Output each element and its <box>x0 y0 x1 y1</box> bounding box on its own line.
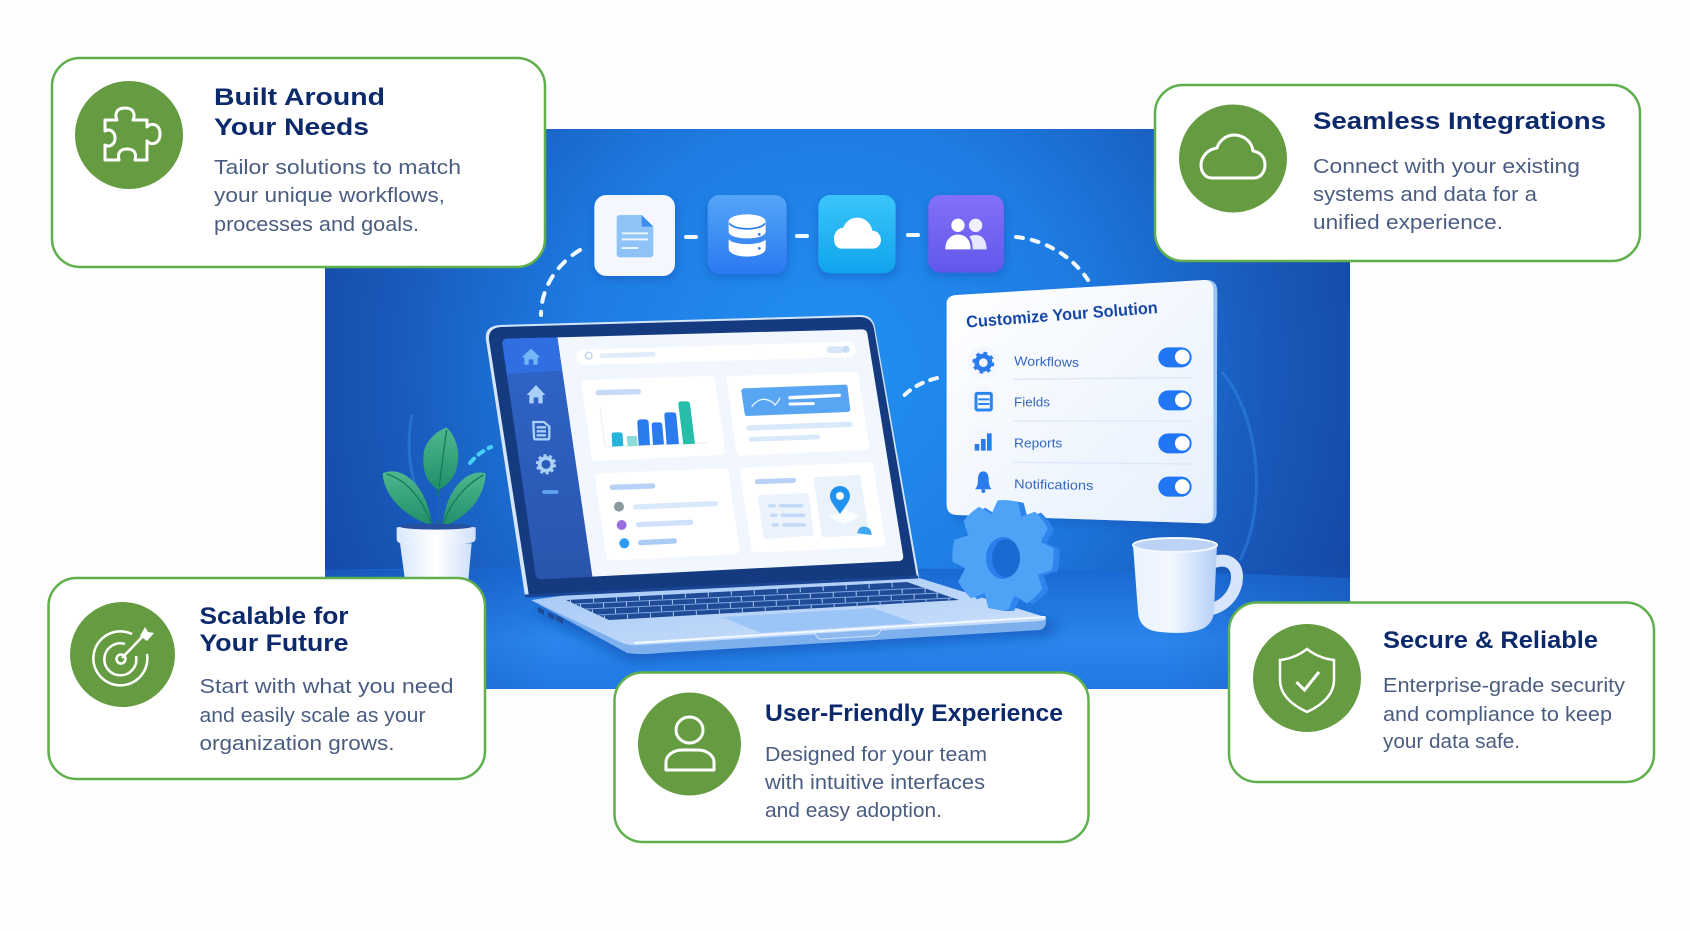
description: unified experience. <box>1313 212 1503 234</box>
description <box>1313 156 1580 234</box>
description: Designed for your team <box>765 744 987 766</box>
card: built around your needs <box>52 58 545 267</box>
heading: User-Friendly Experience <box>765 700 1063 727</box>
icon: shield <box>1253 624 1361 732</box>
laptop ports <box>538 607 563 624</box>
mug rim <box>1133 538 1217 552</box>
heading: Built Around <box>214 84 385 111</box>
laptop trackpad <box>722 608 916 633</box>
description <box>1383 675 1625 753</box>
tile: cloud <box>818 195 896 273</box>
description: and easily scale as your <box>200 705 426 727</box>
laptop base <box>525 577 1046 654</box>
description: Start with what you need <box>200 676 454 698</box>
icon: target <box>70 602 175 707</box>
gear <box>948 496 1064 615</box>
panel shadow <box>953 287 1210 530</box>
row: notifications <box>967 467 1192 499</box>
row: fields <box>967 386 1192 421</box>
tile shadows <box>593 198 1006 280</box>
panel title: Customize Your Solution <box>966 298 1158 332</box>
tile: database <box>708 195 787 274</box>
card: seamless integrations <box>1155 85 1640 261</box>
description <box>200 676 454 755</box>
tile: people <box>928 195 1004 273</box>
card: bar chart <box>586 380 721 457</box>
icon tile row <box>593 195 1006 280</box>
laptop lid <box>486 315 919 596</box>
row: reports <box>967 427 1192 464</box>
description: systems and data for a <box>1313 184 1538 206</box>
heading <box>200 603 348 657</box>
description: and easy adoption. <box>765 800 942 822</box>
plant leaves <box>383 427 486 527</box>
tile: document <box>594 195 675 276</box>
row: notifications: Notifications <box>1014 476 1094 493</box>
gear hole <box>986 537 1020 579</box>
heading: Your Needs <box>214 114 369 141</box>
heading: Scalable for <box>200 603 348 630</box>
scene wall background <box>325 129 1350 689</box>
illustration: blue scene <box>325 129 1350 689</box>
description: your unique workflows, <box>214 185 445 207</box>
card frame <box>52 58 545 267</box>
laptop keyboard <box>566 582 959 620</box>
card: user-friendly experience <box>614 672 1088 842</box>
heading: Secure & Reliable <box>1383 627 1598 654</box>
row: fields: Fields <box>1014 395 1051 410</box>
description <box>764 744 987 822</box>
row: workflows: Workflows <box>1014 353 1080 370</box>
card: map <box>744 466 881 549</box>
card frame <box>1155 85 1640 261</box>
icon: puzzle <box>75 81 183 189</box>
description <box>214 157 461 236</box>
heading <box>214 84 385 141</box>
customize panel <box>947 280 1217 530</box>
icon: user <box>638 692 741 796</box>
laptop <box>486 315 1060 662</box>
description: with intuitive interfaces <box>764 772 985 794</box>
panel body <box>947 280 1217 523</box>
screen page <box>557 329 903 577</box>
dashed connectors <box>470 235 1088 463</box>
card frame <box>48 578 485 779</box>
description: your data safe. <box>1383 731 1520 753</box>
card: list <box>599 472 735 557</box>
description: and compliance to keep <box>1383 704 1612 726</box>
description: Enterprise-grade security <box>1383 675 1625 697</box>
mug <box>1133 538 1237 633</box>
screen sidebar <box>502 337 592 579</box>
description: processes and goals. <box>214 214 419 236</box>
heading: Your Future <box>200 630 348 657</box>
heading: Seamless Integrations <box>1313 108 1606 135</box>
glow arcs <box>409 372 1256 560</box>
mug body <box>1133 545 1217 633</box>
card: scalable for your future <box>48 578 485 779</box>
card frame <box>614 672 1088 842</box>
scene desk surface <box>325 568 1350 689</box>
row: reports: Reports <box>1014 436 1063 451</box>
gear front <box>948 496 1058 614</box>
mug handle <box>1212 561 1237 609</box>
plant <box>383 427 486 580</box>
search bar <box>584 346 850 359</box>
laptop screen <box>502 329 903 579</box>
description: organization grows. <box>200 733 394 755</box>
icon: cloud <box>1179 104 1287 212</box>
card: banner <box>731 376 865 452</box>
row: workflows <box>967 347 1192 379</box>
card frame <box>1229 602 1654 782</box>
description: Connect with your existing <box>1313 156 1580 178</box>
plant pot <box>397 524 476 580</box>
description: Tailor solutions to match <box>214 157 461 179</box>
laptop shadow <box>530 590 1060 662</box>
gear back <box>954 497 1064 615</box>
card: secure and reliable <box>1229 602 1654 782</box>
laptop notch <box>815 629 881 639</box>
